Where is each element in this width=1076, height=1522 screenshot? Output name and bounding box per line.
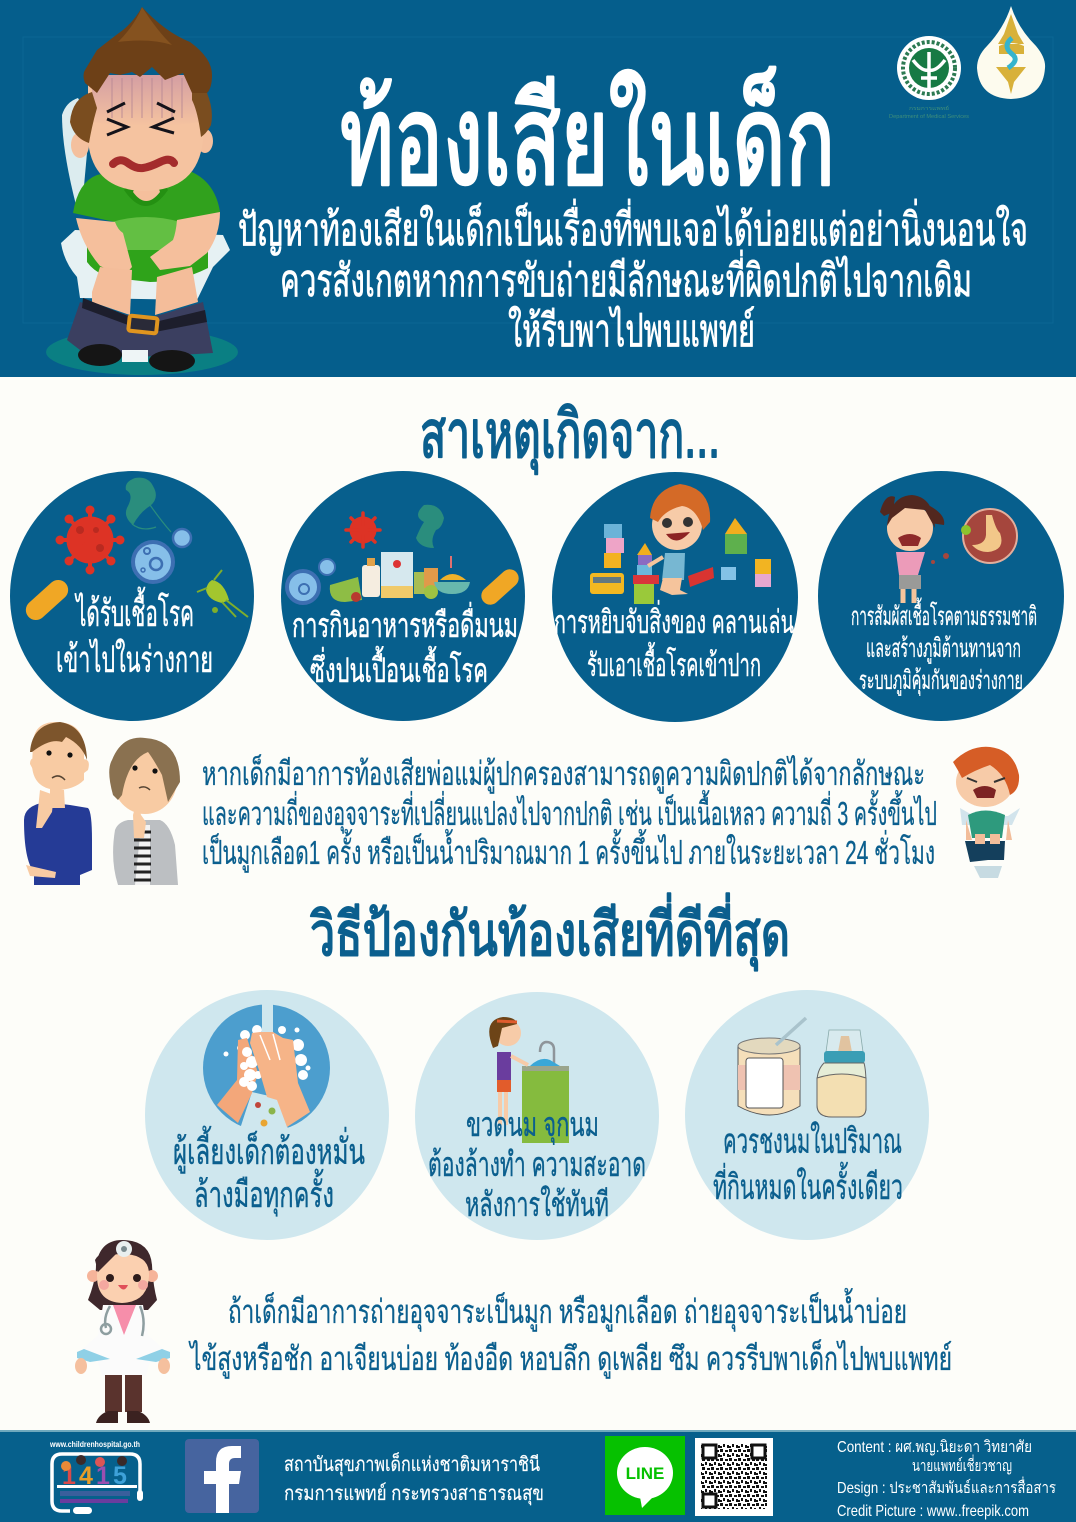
icon: food group [330, 552, 470, 602]
logo: ministry of public health [889, 36, 970, 120]
text: credits: Credit Picture : www..freepik.com [837, 1503, 1029, 1520]
text: เข้าไปในร่างกาย [56, 638, 213, 680]
logo: ministry of public health: Department of Medical Services [889, 114, 970, 120]
panel: cause 2 food [281, 471, 525, 721]
icon: playing boy [648, 484, 710, 595]
icon: green amoeba [416, 505, 444, 548]
header band [0, 0, 1076, 377]
logo: queen sirikit institute [977, 6, 1045, 99]
text: organisation: กรมการแพทย์ กระทรวงสาธารณสุข [284, 1482, 544, 1506]
logo: 1415 hotline: www.childrenhospital.go.th [49, 1440, 140, 1449]
illustration: worried parents [24, 722, 180, 885]
logo: 1415 hotline: 5 [113, 1462, 127, 1490]
panel: prevention 1 hand washing [145, 990, 389, 1240]
text [292, 602, 518, 690]
text [173, 1125, 365, 1217]
icon: washing hands [203, 1000, 330, 1135]
icon: line: LINE [626, 1464, 664, 1483]
woman [113, 820, 178, 885]
panel: prevention 3 formula [685, 990, 929, 1240]
text: credits: นายแพทย์เชี่ยวชาญ [912, 1454, 1012, 1475]
text: organisation: สถาบันสุขภาพเด็กแห่งชาติมหาราชินี [284, 1451, 540, 1477]
icon: microbes [287, 559, 335, 603]
text [56, 586, 213, 680]
icon: sick girl [880, 495, 944, 603]
subtitle: ให้รีบพาไปพบแพทย์ [508, 305, 755, 356]
text: หลังการใช้ทันที [465, 1185, 609, 1224]
icon: girl at sink [489, 1017, 569, 1143]
text: ล้างมือทุกครั้ง [194, 1168, 334, 1217]
logo: 1415 hotline: 1 [96, 1462, 110, 1490]
panel: cause 1 germs [10, 471, 254, 721]
text: ขวดนม จุกนม [466, 1106, 599, 1145]
text: ผู้เลี้ยงเด็กต้องหมั่น [173, 1125, 365, 1174]
icon: milk can [738, 1018, 806, 1115]
text: credits [837, 1439, 1056, 1520]
logo: 1415 hotline [49, 1440, 143, 1514]
qr code [695, 1438, 773, 1516]
text [713, 1121, 903, 1207]
heading: causes: สาเหตุเกิดจาก... [420, 397, 720, 475]
logo: ministry of public health: กรมการแพทย์ [909, 105, 949, 112]
text: ที่กินหมดในครั้งเดียว [713, 1161, 903, 1207]
icon: milk bottle [817, 1030, 866, 1117]
logo: 1415 hotline: 1 [62, 1462, 76, 1490]
panel: cause 3 toys [552, 472, 798, 722]
icon: yellow bacteria [478, 566, 522, 608]
icon: facebook [185, 1439, 259, 1513]
illustration: crying boy [953, 747, 1020, 878]
icon: toy blocks [590, 518, 771, 604]
icon: stomach [931, 509, 1017, 564]
text: ได้รับเชื้อโรค [74, 586, 194, 634]
logos [889, 6, 1045, 120]
paragraph: see a doctor [188, 1288, 952, 1379]
text: การหยิบจับสิ่งของ คลานเล่น [554, 600, 794, 640]
icon: red virus [56, 506, 124, 574]
text [428, 1106, 646, 1224]
footer band [0, 1430, 1076, 1522]
man [24, 802, 92, 885]
text [554, 600, 794, 683]
text: ต้องล้างทำ ความสะอาด [428, 1146, 646, 1184]
text: organisation [284, 1451, 544, 1506]
icon: green parasite [197, 570, 248, 617]
text: ซึ่งปนเปื้อนเชื้อโรค [310, 646, 488, 690]
subtitle [238, 198, 1028, 356]
logo: 1415 hotline: 4 [79, 1462, 93, 1490]
text: credits: Content : ผศ.พญ.นิยะดา วิทยาศัย [837, 1439, 1032, 1456]
icon: line [605, 1436, 685, 1515]
illustration: doctor [75, 1240, 170, 1423]
text: การกินอาหารหรือดื่มนม [292, 602, 518, 645]
icon: green amoeba [126, 478, 171, 532]
icon: yellow bacteria [22, 576, 72, 624]
icon: red virus [346, 513, 380, 547]
panel: cause 4 girl [818, 471, 1064, 721]
icon: blue microbes [133, 529, 191, 582]
heading: prevention: วิธีป้องกันท้องเสียที่ดีที่สุด [310, 893, 790, 971]
panel: prevention 2 washing bottles [415, 992, 659, 1240]
text: ควรชงนมในปริมาณ [723, 1121, 902, 1161]
text: รับเอาเชื้อโรคเข้าปาก [587, 642, 761, 683]
paragraph: symptoms [202, 754, 937, 873]
illustration: sick boy on toilet [46, 7, 238, 375]
text [851, 597, 1037, 696]
